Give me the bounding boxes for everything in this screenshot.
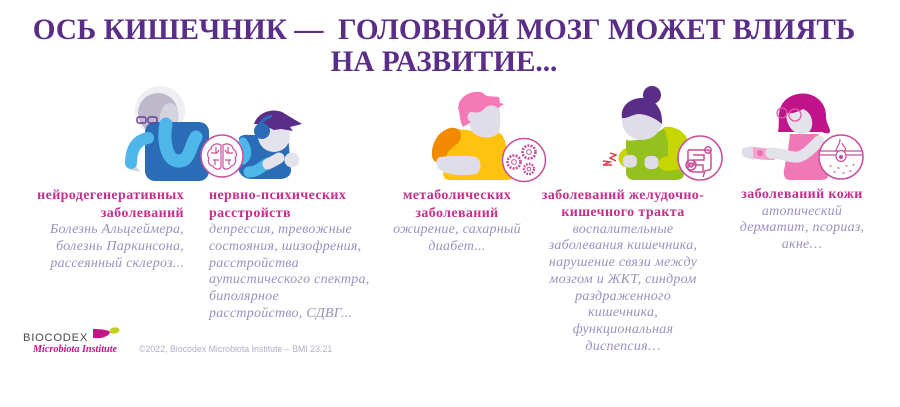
icon: person with skin disease bbox=[742, 94, 830, 180]
logo shapes bbox=[93, 327, 120, 338]
text: metabolic: заболеваний bbox=[415, 206, 499, 220]
text: neuropsychiatric: расстройства bbox=[209, 256, 299, 271]
text: digestive: кишечника, bbox=[588, 305, 658, 320]
text: metabolic: диабет... bbox=[428, 239, 486, 254]
text: skin bbox=[740, 187, 864, 252]
icon: person with digestive disease bbox=[603, 86, 690, 180]
icon: intestine badge bbox=[678, 136, 722, 180]
text: neurodegenerative: рассеянный склероз... bbox=[50, 256, 184, 271]
text: neurodegenerative: Болезнь Альцгеймера, bbox=[50, 222, 184, 237]
text: digestive: кишечного тракта bbox=[561, 205, 685, 220]
text: neurodegenerative bbox=[37, 188, 184, 271]
icon: skin badge bbox=[819, 135, 863, 179]
copyright: ©2022, Biocodex Microbiota Institute – BMI 23.21 bbox=[139, 344, 332, 354]
text: metabolic: ожирение, сахарный bbox=[393, 222, 521, 237]
text: skin: дерматит, псориаз, bbox=[740, 220, 864, 235]
text: skin: заболеваний кожи bbox=[741, 187, 863, 202]
text: neuropsychiatric: депрессия, тревожные bbox=[209, 222, 352, 237]
icon: gears badge bbox=[502, 138, 546, 182]
logo script: Microbiota Institute bbox=[33, 344, 117, 355]
text: metabolic bbox=[393, 188, 521, 254]
logo: Biocodex Microbiota Institute bbox=[23, 327, 120, 355]
text: digestive: нарушение связи между bbox=[549, 255, 697, 270]
text: neuropsychiatric: расстройств bbox=[209, 206, 291, 220]
icon: person with metabolic disease bbox=[432, 92, 513, 180]
text: digestive: диспепсия… bbox=[585, 339, 661, 354]
text: neuropsychiatric: расстройство, СДВГ... bbox=[209, 306, 352, 321]
text: neuropsychiatric: аутистического спектра, bbox=[209, 272, 370, 287]
title: ОСЬ КИШЕЧНИК — ГОЛОВНОЙ МОЗГ МОЖЕТ ВЛИЯТЬ НА РАЗВИТИЕ... bbox=[33, 14, 855, 78]
text: neuropsychiatric: состояния, шизофрения, bbox=[209, 239, 361, 254]
text: digestive: заболеваний желудочно- bbox=[542, 188, 704, 202]
text: skin: акне… bbox=[782, 237, 822, 252]
icon: elderly person bbox=[130, 86, 209, 181]
text: digestive: воспалительные bbox=[573, 222, 673, 236]
text: neuropsychiatric bbox=[208, 188, 370, 321]
logo wordmark: BIOCODEX bbox=[23, 332, 88, 344]
icon: brain badge bbox=[201, 135, 243, 177]
text: neurodegenerative: нейродегенеративных bbox=[37, 188, 184, 203]
text: digestive: функциональная bbox=[573, 322, 673, 337]
text: metabolic: метаболических bbox=[403, 188, 511, 203]
text: digestive bbox=[542, 188, 704, 354]
text: neuropsychiatric: нервно-психических bbox=[209, 188, 346, 203]
text: digestive: заболевания кишечника, bbox=[549, 238, 697, 253]
text: digestive: мозгом и ЖКТ, синдром bbox=[549, 272, 697, 287]
icon: young person with headphones bbox=[238, 110, 302, 179]
text: skin: атопический bbox=[762, 204, 842, 218]
text: neurodegenerative: заболеваний bbox=[101, 206, 184, 220]
text: neuropsychiatric: биполярное bbox=[209, 289, 279, 304]
text: neurodegenerative: болезнь Паркинсона, bbox=[56, 239, 184, 254]
text: digestive: раздраженного bbox=[575, 289, 671, 304]
